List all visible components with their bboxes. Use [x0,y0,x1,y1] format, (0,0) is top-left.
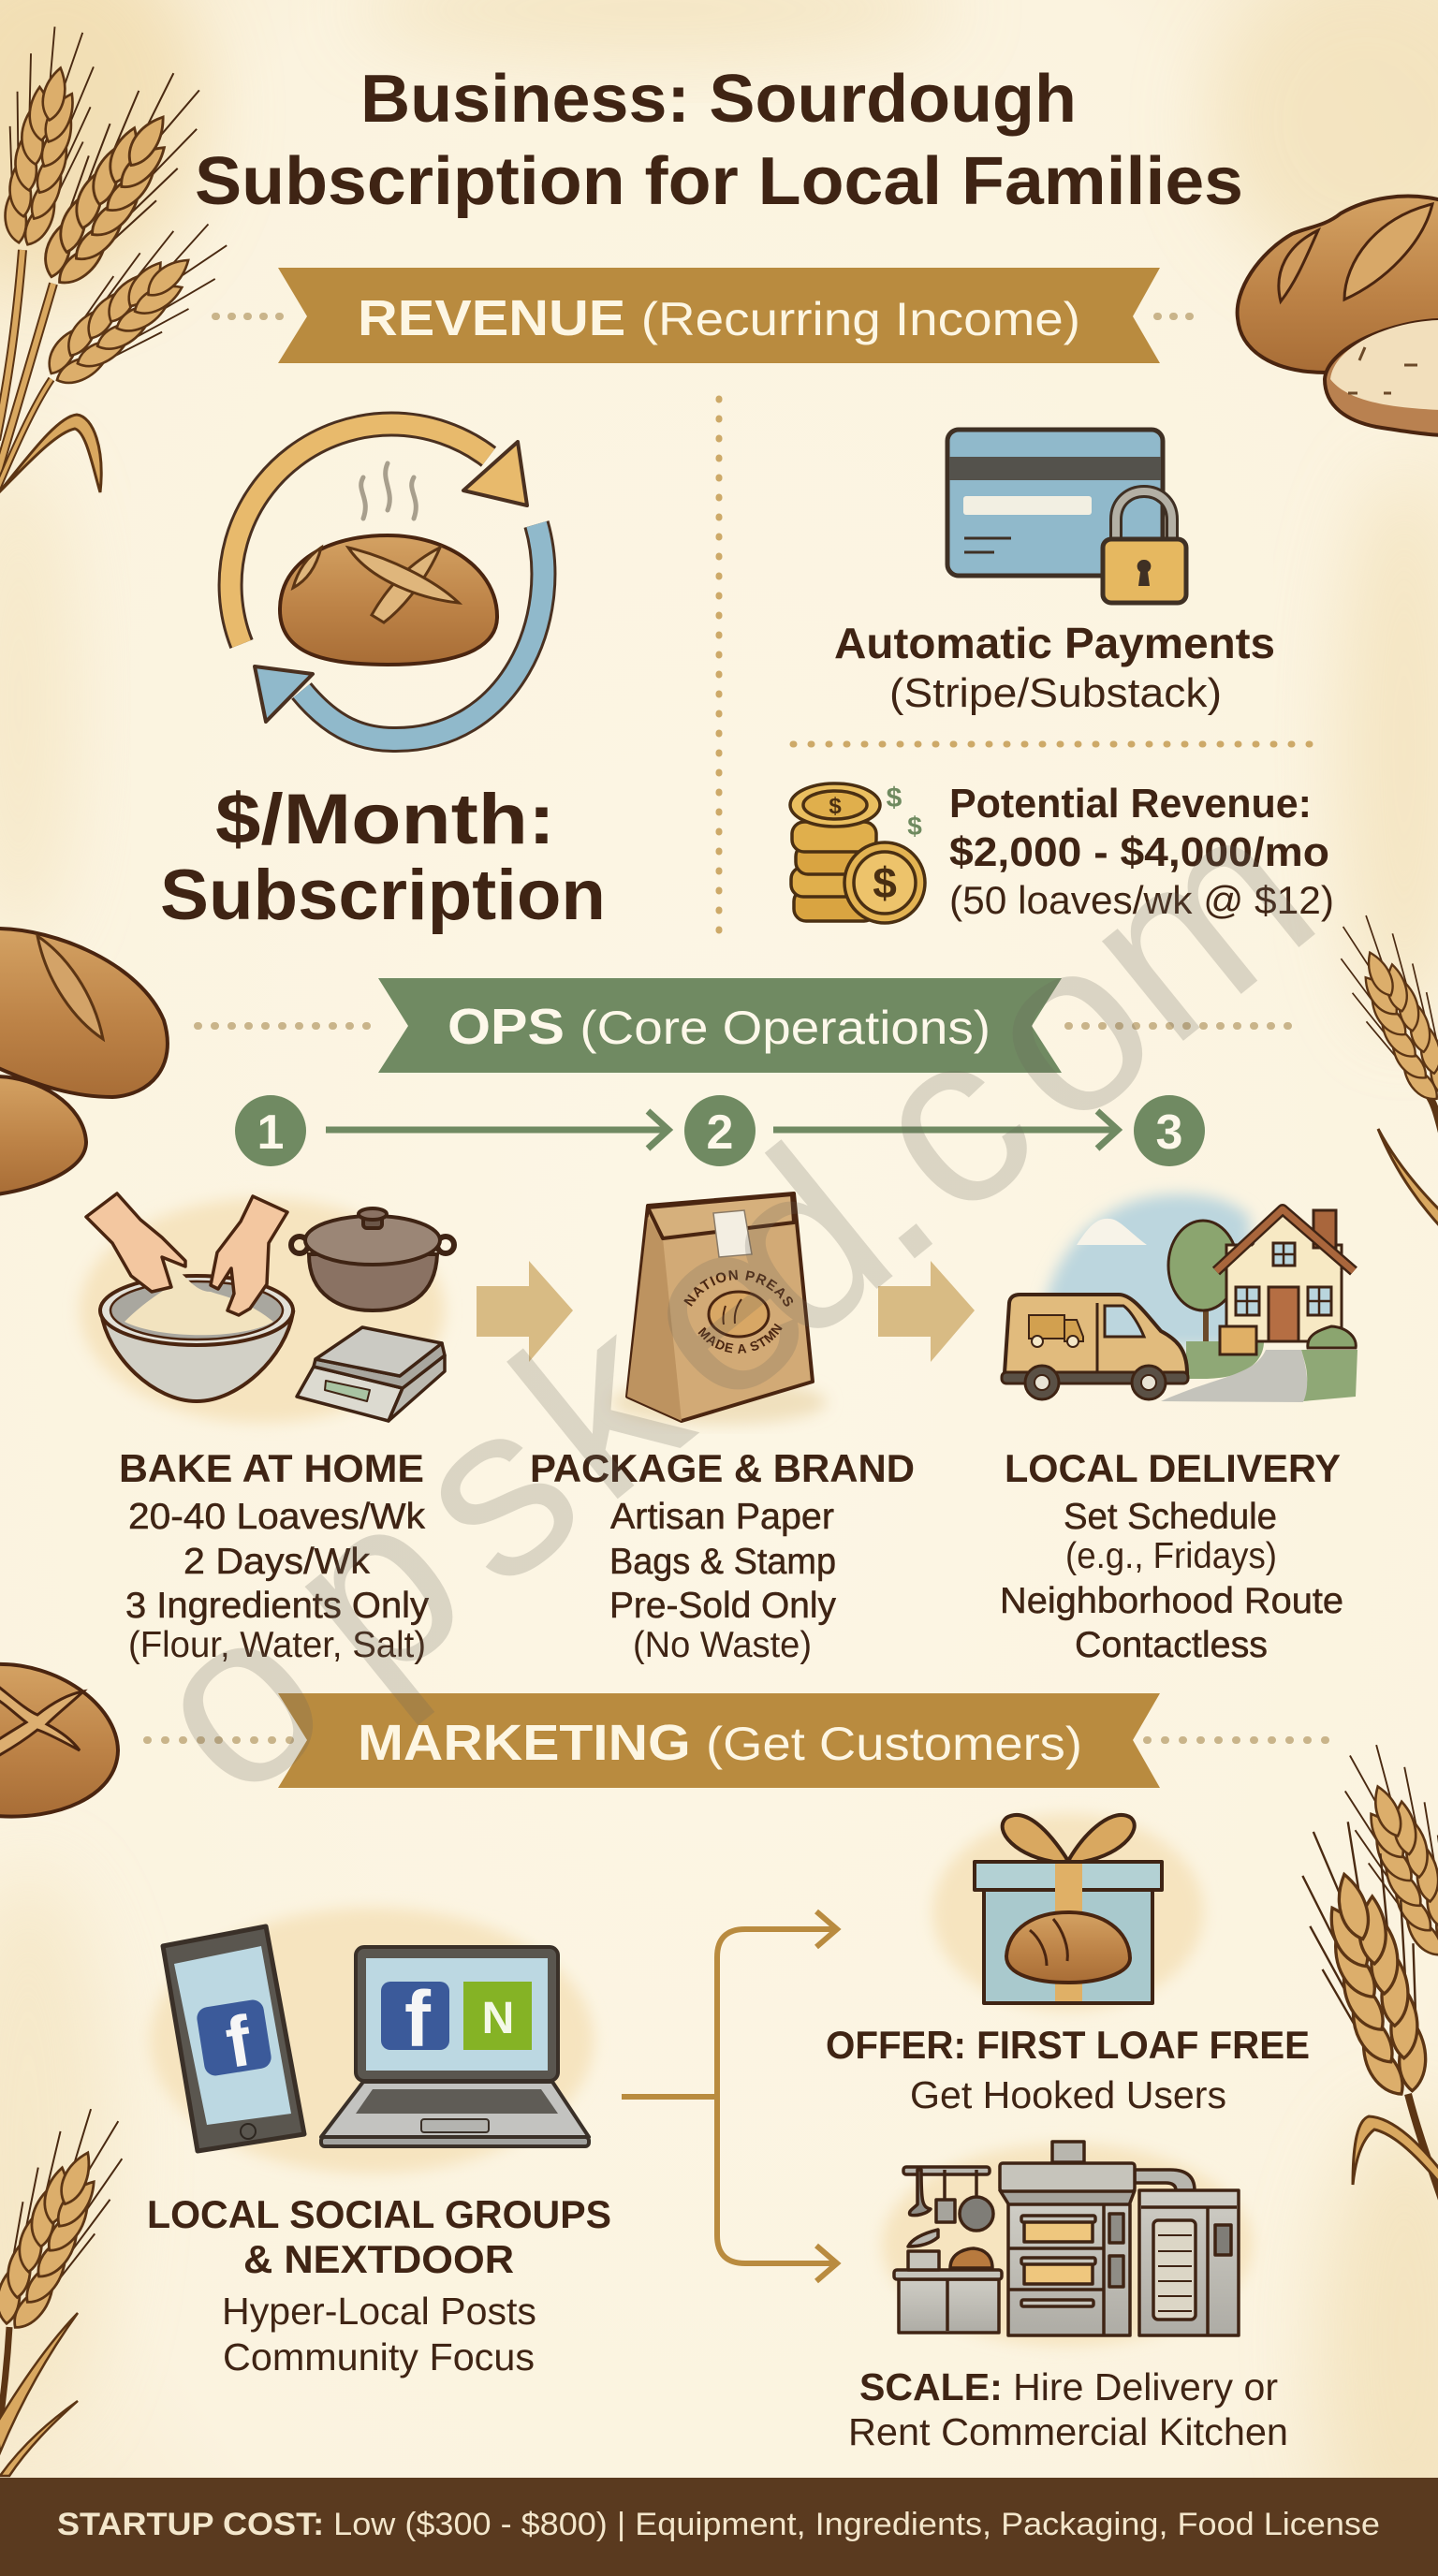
step 1 text: BAKE AT HOME [119,1446,424,1490]
text: automatic payments: Automatic Payments [834,619,1275,667]
icon: gift box with loaf [932,1814,1204,2011]
text: offer [826,2023,1310,2116]
wheat: lower left [0,2100,140,2476]
step 1 text: (Flour, Water, Salt) [128,1625,426,1665]
icon: coin stack [790,783,925,923]
step 1 text: 20-40 Loaves/Wk [128,1497,426,1537]
bread: mid left [0,929,168,1194]
icon: coin stack: $ [907,812,922,841]
ops section [57,978,1357,1704]
text: local social groups: LOCAL SOCIAL GROUPS [147,2192,611,2236]
step numbers and arrows: 2 [707,1105,733,1160]
step 1 text: 2 Days/Wk [183,1542,371,1582]
dutch oven [291,1208,454,1310]
icon: coin stack: $ [887,783,902,813]
title [195,62,1243,219]
divider [793,741,1316,747]
connector arrows [622,1911,837,2281]
step 3 text: (e.g., Fridays) [1065,1536,1277,1576]
kitchen scale [297,1327,445,1421]
title: Business: Sourdough [360,62,1077,137]
icon: phone and laptop [150,1908,594,2174]
step 2 text: Artisan Paper [610,1497,834,1537]
icon: phone and laptop: f [221,2001,257,2084]
bread: top right [1238,197,1438,435]
ops banner: OPS (Core Operations) [448,999,990,1055]
step 3 text [1000,1446,1343,1665]
step 2 text: Bags & Stamp [609,1542,836,1582]
marketing section [147,1693,1329,2453]
text: scale: Rent Commercial Kitchen [848,2410,1288,2453]
heading: subscription price: Subscription [160,856,606,935]
arrow [878,1261,975,1362]
text: automatic payments [834,619,1275,716]
icon: baking at home [80,1193,454,1423]
step numbers and arrows: 1 [257,1105,284,1160]
hands [86,1193,287,1315]
marketing banner [147,1693,1329,1788]
bread: lower left [0,1664,118,1817]
step numbers and arrows [235,1095,1205,1166]
text: scale: SCALE: Hire Delivery or [859,2365,1278,2408]
heading: subscription price [160,780,606,935]
step 1 text [119,1446,430,1665]
text: local social groups: Community Focus [223,2335,535,2378]
step 3 text: Contactless [1075,1625,1268,1665]
wheat: mid right [1325,906,1438,1228]
divider [715,399,723,936]
watermark: opsked.com [98,754,1361,1850]
footer: startup cost [0,2478,1438,2576]
text: potential revenue: (50 loaves/wk @ $12) [949,878,1334,922]
icon: paper bag: MADE A STMN [698,1324,783,1354]
step numbers and arrows: 3 [1156,1105,1182,1160]
step 2 text [530,1446,915,1665]
heading: subscription price: $/Month: [215,780,555,859]
step 2 text: Pre-Sold Only [609,1586,836,1626]
icon: delivery van and house [1002,1194,1357,1402]
step 3 text: LOCAL DELIVERY [1005,1446,1341,1490]
text: local social groups: Hyper-Local Posts [222,2290,536,2333]
wheat: lower right [1285,1736,1438,2200]
icon: credit card with padlock [947,430,1186,603]
mixing bowl with dough [100,1264,293,1401]
step 1 text: 3 Ingredients Only [125,1586,430,1626]
text: scale [848,2365,1288,2453]
text: potential revenue: Potential Revenue: [949,781,1312,827]
text: offer: OFFER: FIRST LOAF FREE [826,2023,1310,2067]
footer: startup cost: STARTUP COST: Low ($300 - $800) | Equipment, Ingredients, Packaging, Food License [57,2507,1380,2542]
text: offer: Get Hooked Users [910,2073,1226,2116]
text: potential revenue [949,781,1334,922]
revenue banner [215,268,1203,363]
arrow [477,1261,573,1362]
revenue section [160,268,1334,936]
wheat: top left [0,22,242,493]
revenue banner: REVENUE (Recurring Income) [358,290,1080,346]
step 3 text: Set Schedule [1064,1497,1277,1537]
text: automatic payments: (Stripe/Substack) [889,670,1222,716]
step 3 text: Neighborhood Route [1000,1581,1343,1621]
icon: coin stack: $ [829,794,842,819]
marketing banner: MARKETING (Get Customers) [358,1715,1082,1771]
icon: phone and laptop: N [482,1994,514,2043]
title: Subscription for Local Families [195,144,1243,219]
text: potential revenue: $2,000 - $4,000/mo [949,829,1329,875]
icon: paper bag: NATION PREAS [683,1269,794,1307]
van [1002,1295,1188,1399]
icon: phone and laptop: f [404,1975,432,2063]
icon: commercial kitchen [882,2142,1253,2346]
text: local social groups [147,2192,611,2378]
text: local social groups: & NEXTDOOR [243,2237,514,2281]
icon: paper bag [610,1192,829,1430]
step 2 text: (No Waste) [633,1625,812,1665]
step 2 text: PACKAGE & BRAND [530,1446,915,1490]
icon: recurring cycle with loaf [230,424,543,739]
icon: coin stack: $ [873,858,897,907]
ops banner [198,978,1302,1073]
